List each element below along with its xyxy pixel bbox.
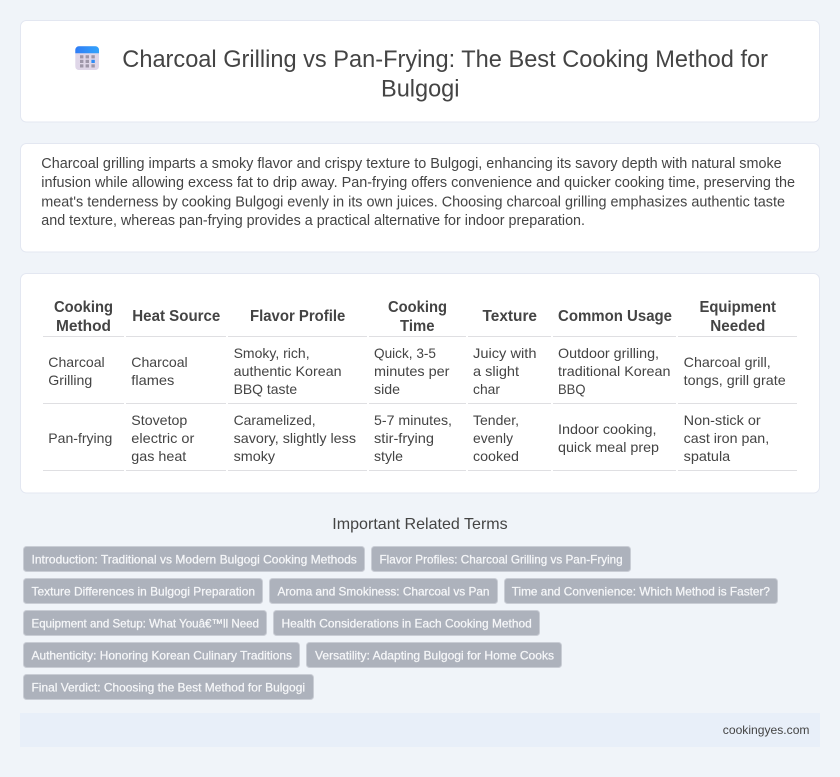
tag: Time and Convenience: Which Method is Faster? xyxy=(512,584,770,598)
table row: charcoal grilling: Outdoor grilling, xyxy=(558,345,659,361)
tag xyxy=(274,610,540,636)
intro paragraph: meat's tenderness by cooking Bulgogi evenly in its own juices. Choosing charcoal grilling emphasizes authentic taste xyxy=(41,194,785,210)
table row: pan-frying: evenly xyxy=(473,430,513,446)
table row: charcoal grilling: side xyxy=(374,381,400,397)
table row: pan-frying: Stovetop xyxy=(131,412,188,428)
icon: calendar xyxy=(75,46,99,70)
table row: pan-frying: Caramelized, xyxy=(234,412,316,428)
intro paragraph: and texture, whereas pan-frying provides a practical alternative for indoor preparation. xyxy=(41,213,585,229)
panel: title header xyxy=(20,20,820,122)
table row: pan-frying: gas heat xyxy=(131,448,186,464)
table row: pan-frying: electric or xyxy=(131,430,195,446)
table row: charcoal grilling: a slight xyxy=(473,363,519,379)
tag: Aroma and Smokiness: Charcoal vs Pan xyxy=(278,584,490,598)
intro paragraph xyxy=(41,156,795,229)
table row: charcoal grilling: Juicy with xyxy=(473,345,536,361)
panel: related term tags xyxy=(24,546,778,700)
panel: comparison table xyxy=(20,274,820,493)
table header row: Cooking xyxy=(54,299,113,316)
tag xyxy=(270,578,498,604)
table header row: Equipment xyxy=(700,299,777,316)
table row: pan-frying: cast iron pan, xyxy=(684,430,769,446)
table row: pan-frying: stir-frying xyxy=(374,430,434,446)
footer: cookingyes.com xyxy=(723,723,810,737)
tag: Introduction: Traditional vs Modern Bulgogi Cooking Methods xyxy=(32,552,357,566)
table header row: Heat Source xyxy=(132,308,220,325)
tag: Flavor Profiles: Charcoal Grilling vs Pan-Frying xyxy=(380,552,623,566)
title: Charcoal Grilling vs Pan-Frying: The Best Cooking Method for xyxy=(122,46,768,73)
intro paragraph: infusion while allowing excess fat to drip away. Pan-frying offers convenience and quicker cooking time, preserving the xyxy=(41,175,795,191)
table header row: Texture xyxy=(482,308,537,325)
table row: charcoal grilling: Charcoal grill, xyxy=(684,354,771,370)
table row: pan-frying: smoky xyxy=(234,448,275,464)
table row: charcoal grilling: Grilling xyxy=(48,372,92,388)
table row: pan-frying: 5-7 minutes, xyxy=(374,412,452,428)
table header row: Common Usage xyxy=(558,308,672,325)
table row: pan-frying: savory, slightly less xyxy=(234,430,356,446)
table row: charcoal grilling: BBQ xyxy=(558,381,586,397)
tag: Authenticity: Honoring Korean Culinary Traditions xyxy=(32,648,292,662)
table header row: Cooking xyxy=(388,299,447,316)
tag xyxy=(24,578,262,604)
table row: pan-frying: quick meal prep xyxy=(558,439,659,455)
intro paragraph: Charcoal grilling imparts a smoky flavor and crispy texture to Bulgogi, enhancing its savory depth with natural smoke xyxy=(41,156,782,172)
table row: pan-frying: Indoor cooking, xyxy=(558,421,656,437)
tag xyxy=(24,546,364,572)
table header row: Method xyxy=(56,318,111,335)
table row: charcoal grilling: Quick, 3-5 xyxy=(374,345,436,361)
table row: pan-frying: spatula xyxy=(684,448,730,464)
table header row: Needed xyxy=(710,318,765,335)
table row: charcoal grilling: BBQ taste xyxy=(234,381,297,397)
table row: pan-frying: style xyxy=(374,448,403,464)
table row: charcoal grilling: minutes per xyxy=(374,363,450,379)
table row: charcoal grilling: Charcoal xyxy=(48,354,105,370)
tag: Versatility: Adapting Bulgogi for Home Cooks xyxy=(315,648,554,662)
title xyxy=(122,46,768,102)
title: Bulgogi xyxy=(381,76,460,102)
tag xyxy=(306,642,562,668)
table row: charcoal grilling: Charcoal xyxy=(131,354,188,370)
heading: important related terms: Important Related Terms xyxy=(332,516,508,533)
table row: charcoal grilling xyxy=(48,345,786,397)
table row: charcoal grilling: tongs, grill grate xyxy=(684,372,786,388)
table header row xyxy=(54,299,777,335)
tag: Health Considerations in Each Cooking Method xyxy=(282,616,532,630)
table row: pan-frying xyxy=(48,412,769,464)
table row: charcoal grilling: traditional Korean xyxy=(558,363,670,379)
table row: charcoal grilling: authentic Korean xyxy=(234,363,342,379)
table row: pan-frying: Tender, xyxy=(473,412,519,428)
table row: charcoal grilling: flames xyxy=(131,372,174,388)
tag xyxy=(24,610,266,636)
table row: charcoal grilling: Smoky, rich, xyxy=(234,345,310,361)
table header row: Flavor Profile xyxy=(250,308,345,325)
tag: Texture Differences in Bulgogi Preparation xyxy=(32,584,255,598)
table row: pan-frying: cooked xyxy=(473,448,519,464)
tag xyxy=(372,546,630,572)
tag: Equipment and Setup: What Youâ€™ll Need xyxy=(32,616,259,630)
table row: pan-frying: Pan-frying xyxy=(48,430,112,446)
tag xyxy=(504,578,778,604)
tag: Final Verdict: Choosing the Best Method for Bulgogi xyxy=(32,680,305,694)
table header row: Time xyxy=(400,318,435,335)
panel: introduction text xyxy=(20,144,820,252)
tag xyxy=(24,674,314,700)
table row: charcoal grilling: char xyxy=(473,381,500,397)
table row: pan-frying: Non-stick or xyxy=(684,412,761,428)
footer xyxy=(20,713,820,747)
tag xyxy=(24,642,300,668)
